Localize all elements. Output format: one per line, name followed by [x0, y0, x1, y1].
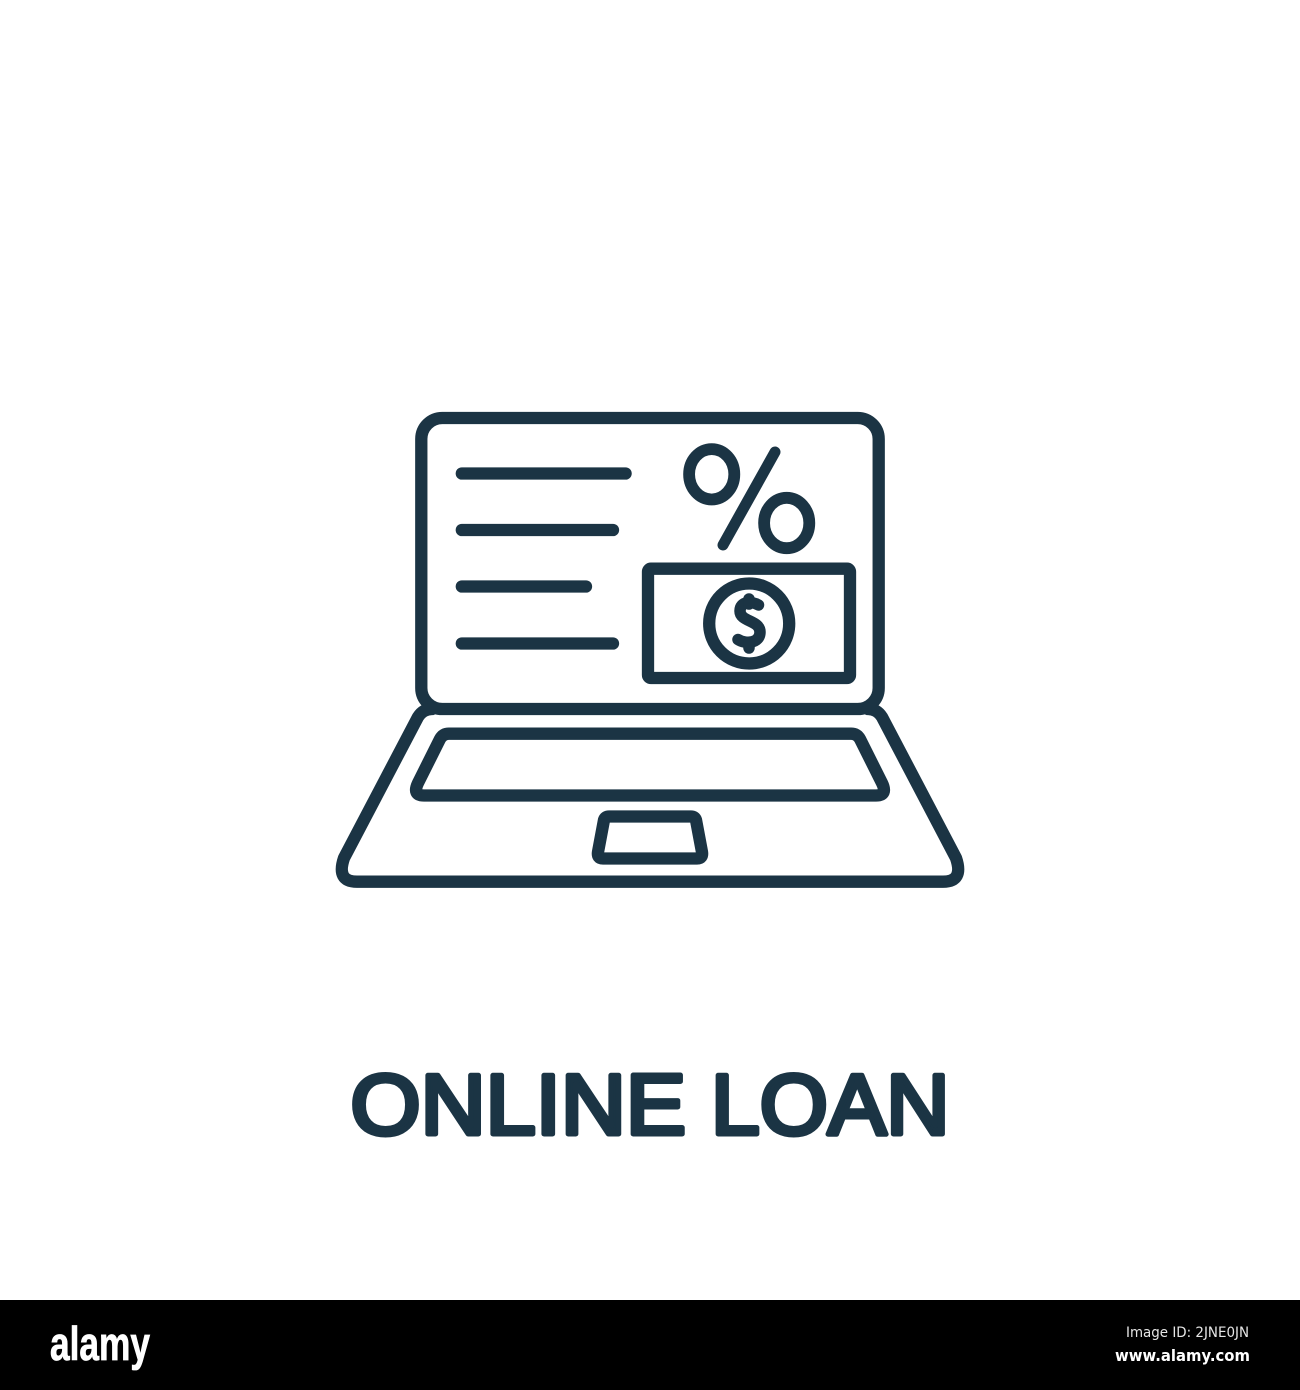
title: [350, 1058, 950, 1153]
image id: Image ID: 2JNE0JN: [1126, 1325, 1249, 1341]
text lines on screen: [462, 474, 626, 644]
footer logo: alamy: [50, 1317, 150, 1370]
icon: laptop base: [342, 709, 958, 882]
icon: trackpad: [598, 816, 702, 858]
icon: keyboard area: [416, 734, 884, 796]
website: www.alamy.com: [1115, 1346, 1250, 1365]
footer bar: [0, 1300, 1300, 1390]
icon: banknote: [648, 569, 850, 678]
icon: laptop screen: [421, 418, 879, 709]
title: LOAN: [711, 1058, 950, 1153]
icon: percent sign: [689, 449, 809, 548]
icon: online loan laptop: [342, 418, 958, 882]
icon: dollar coin: [709, 584, 789, 664]
title: ONLINE: [350, 1058, 686, 1153]
